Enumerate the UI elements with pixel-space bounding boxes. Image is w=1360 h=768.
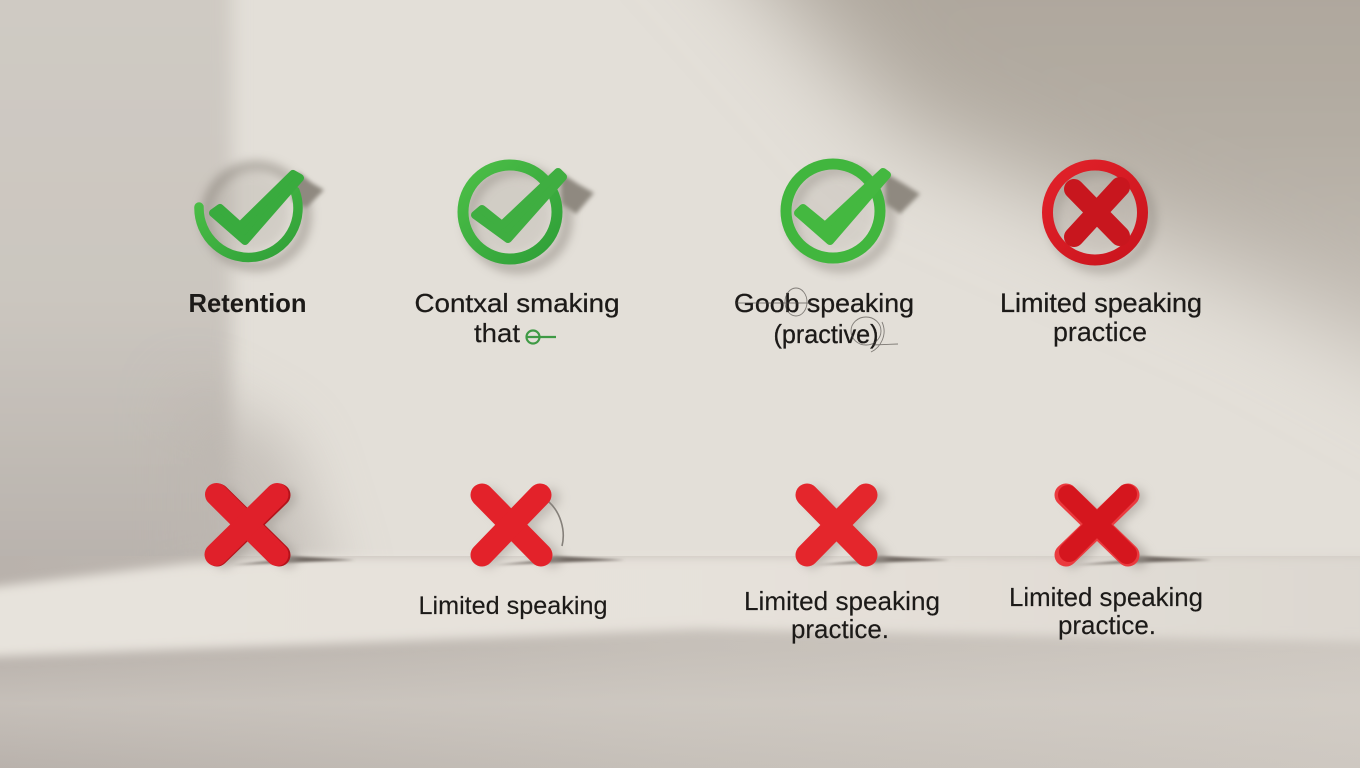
column 2 top: label: that	[474, 318, 521, 348]
column 2 top: label: Contxal smaking	[414, 288, 620, 318]
column 4 bottom: label	[1009, 582, 1203, 640]
column 4 top: label: Limited speaking	[1000, 288, 1202, 318]
column 4 bottom: label: Limited speaking	[1009, 582, 1203, 612]
column 1 top: green check icon	[199, 166, 324, 266]
floor	[0, 556, 1360, 768]
pencil scribbles	[735, 288, 898, 352]
column 3 top: green check icon	[786, 164, 920, 267]
column 4 top: label: practice	[1053, 317, 1147, 347]
corner shadow	[180, 380, 340, 600]
column 3 bottom: label	[744, 586, 940, 644]
column 1 top: label: Retention	[188, 288, 306, 318]
column 3 bottom: label: practice.	[791, 614, 889, 644]
column 2 top: green check icon	[463, 165, 594, 268]
column 2 bottom: red cross icon	[482, 495, 625, 565]
column 3 bottom: red cross icon	[807, 495, 950, 565]
column 3 top: label: (practive)	[774, 319, 878, 349]
shadow band upper right	[660, 0, 1360, 420]
column 1 bottom: red cross icon	[216, 494, 355, 565]
column 3 top: label	[734, 288, 914, 352]
column 4 top: label	[1000, 288, 1202, 347]
column 2 top: label	[414, 288, 620, 348]
column 4 bottom: red cross icon	[1066, 494, 1212, 565]
green scribble	[526, 330, 556, 344]
column 2 bottom: label: Limited speaking	[418, 592, 608, 620]
left wall shadow	[0, 0, 232, 600]
column 3 top: label: Goob speaking	[734, 288, 914, 318]
column 4 top: red cross in ring icon	[1048, 165, 1151, 268]
column 3 bottom: label: Limited speaking	[744, 586, 940, 616]
column 4 bottom: label: practice.	[1058, 610, 1156, 640]
